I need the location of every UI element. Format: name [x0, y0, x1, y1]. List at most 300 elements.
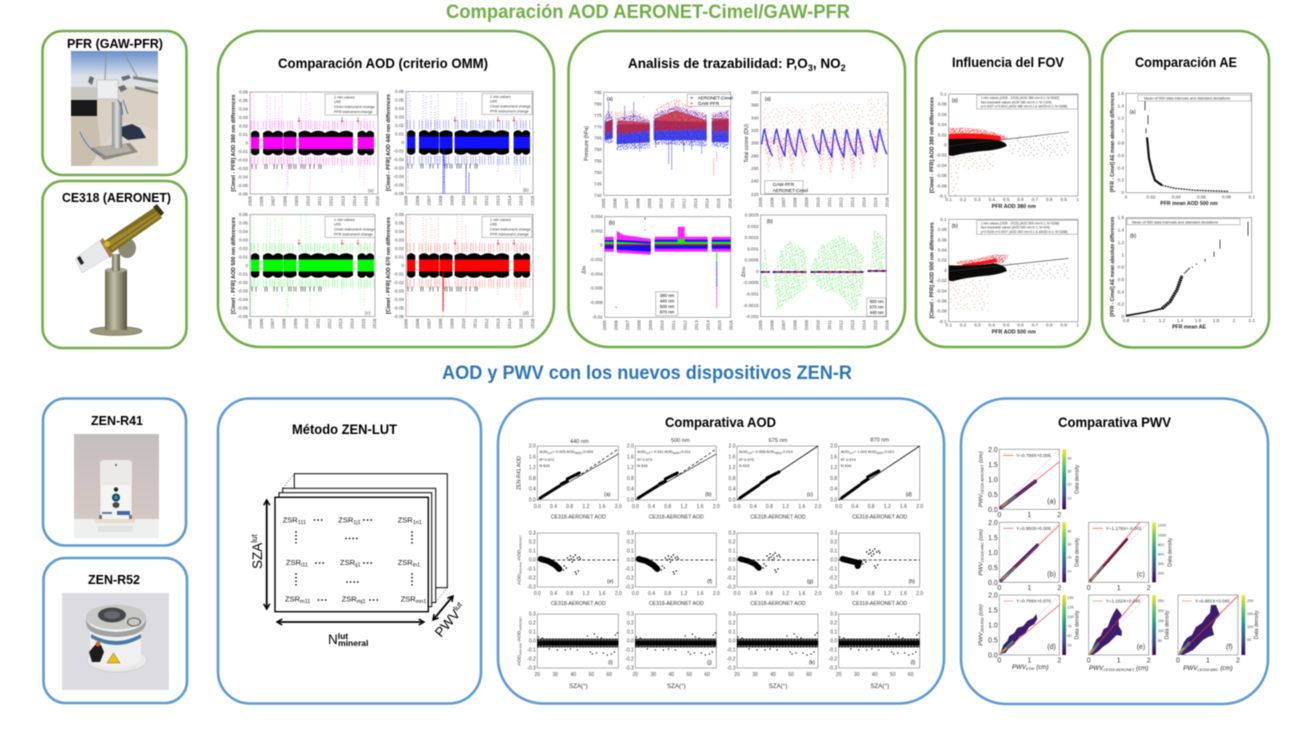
- chart: AOD 670 nm differences: [386, 212, 535, 329]
- chart: AE vs AOD: 0: [1125, 194, 1128, 199]
- chart: PWV (b): PWV: [978, 562, 984, 576]
- chart: PWV (b): 2: [1057, 585, 1061, 592]
- chart: pressure: 760: [594, 147, 602, 152]
- chart: PWV (a): 0.0: [988, 507, 998, 514]
- chart: FOV 500 nm: [930, 217, 1079, 335]
- chart: PWV (d): Data density: [1074, 610, 1080, 639]
- chart: AOD 670 nm differences: 0.02: [395, 246, 404, 251]
- chart group: AOD 870 nm column: -0.021: [883, 449, 894, 454]
- chart group: AOD 500 nm column: 1.6: [627, 454, 634, 460]
- chart group: AOD 500 nm column: 2.0: [713, 504, 720, 510]
- chart group: AOD 675 nm column: -0.014: [782, 449, 794, 454]
- panel: ZEN-R52: [44, 558, 187, 703]
- chart: AOD 500 nm differences: 2005: [248, 318, 252, 329]
- chart group: AOD 870 nm column: 2.0: [916, 504, 923, 510]
- chart group: AOD 870 nm column: 60: [908, 672, 914, 678]
- chart: PWV (d): PWV: [978, 632, 984, 646]
- chart: AE vs AE: 0.8: [1118, 265, 1124, 270]
- panel: ZEN-R41: [43, 398, 186, 546]
- chart: delta tau O3: 2013: [850, 320, 855, 330]
- chart group: AOD 440 nm column: 0.8: [566, 504, 573, 510]
- chart: AOD 670 nm differences: -0.03: [394, 288, 404, 294]
- chart: PWV (e): CE318-AERONET: [1103, 668, 1135, 672]
- panel: Método ZEN-LUT: [218, 398, 481, 704]
- chart: FOV 500 nm: 0.4: [989, 322, 995, 327]
- chart: AOD 500 nm differences: 2011: [316, 318, 320, 328]
- chart: AOD 500 nm differences: 2016: [372, 318, 377, 329]
- chart: PWV (c): 400: [1158, 562, 1164, 566]
- chart: AE vs AE: [1110, 215, 1255, 331]
- chart: FOV 500 nm: 0.02: [938, 258, 947, 263]
- heading: ZEN-R41: ZEN-R41: [91, 414, 143, 428]
- chart group: AOD 440 nm column: 0.0: [534, 504, 541, 510]
- heading: Comparación AOD (criterio OMM): Comparación AOD (criterio OMM): [278, 56, 488, 71]
- chart: total ozone: 360: [751, 102, 759, 107]
- chart: PWV (a): 2.0: [988, 447, 998, 454]
- chart: PWV (b): [978, 520, 1080, 592]
- panel: Comparación AE: [1102, 31, 1269, 348]
- chart: delta tau O3: 500 nm: [870, 299, 884, 304]
- chart group: AOD 870 nm column: 0.0: [835, 591, 842, 597]
- label: PWV lut: PWV: [432, 607, 463, 640]
- chart group: AOD 675 nm column: 2.0: [815, 504, 822, 510]
- chart: AOD 670 nm differences: 2005: [404, 318, 408, 329]
- matrix labels: ZSR cells: in1: [413, 562, 420, 568]
- chart: PWV (c): 0: [1087, 585, 1091, 592]
- chart: pressure: 745: [594, 181, 602, 186]
- chart group: AOD 440 nm column: AOD: [517, 574, 522, 585]
- chart: PWV (b): 2.0: [988, 520, 998, 527]
- chart group: AOD 500 nm column: 30: [651, 672, 656, 678]
- chart group: AOD 675 nm column: 0.4: [729, 487, 736, 493]
- chart: FOV 500 nm: 0.2: [960, 322, 967, 327]
- chart: AE vs AOD: Mean of 500 data intervals and standard deviations: [1144, 97, 1230, 101]
- chart: pressure: 2013: [693, 198, 698, 209]
- chart: AOD 380 nm differences: 2016: [375, 196, 380, 206]
- chart: PWV (f): Data density: [1254, 610, 1260, 639]
- chart group: AOD 440 nm column: 0.8: [529, 476, 536, 482]
- chart: AOD 380 nm differences: -0.02: [238, 158, 248, 162]
- matrix labels: ZSR cells: mn1: [416, 599, 426, 605]
- chart: AE vs AOD: PFR mean AOD 500 nm: [1160, 201, 1218, 207]
- chart: AOD 670 nm differences: 2008: [438, 318, 443, 329]
- chart: PWV (c): 1: [1117, 585, 1121, 592]
- chart group: AOD 500 nm column: 2.0: [627, 444, 634, 450]
- chart group: AOD 870 nm column: 870 nm: [870, 438, 889, 444]
- chart: FOV 380 nm: 0.7: [1032, 197, 1039, 202]
- chart: PWV (c): Y=1.178X+-0.001: [1106, 526, 1142, 531]
- chart group: AOD 440 nm column: 20: [535, 672, 540, 678]
- chart group: AOD 675 nm column: R² 0.975: [739, 457, 754, 462]
- chart group: AOD 440 nm column: -0.3: [527, 584, 536, 590]
- chart: delta tau O3: 2006: [770, 320, 775, 330]
- chart: PWV (d): Y=0.799X+0.070: [1016, 598, 1051, 604]
- chart: total ozone: 2011: [827, 197, 832, 207]
- chart group: AOD 500 nm column: SZA(°): [667, 683, 686, 690]
- chart: PWV (d): 1: [1027, 658, 1031, 664]
- chart: PWV (d): (d): [1047, 644, 1056, 651]
- chart: AOD 500 nm differences: 2013: [338, 318, 343, 329]
- chart group: AOD 440 nm column: CE318-AERONET AOD: [551, 601, 606, 607]
- chart: AOD 380 nm differences: 0.06: [239, 90, 248, 94]
- matrix labels: ZSR cells: 1n1: [413, 520, 422, 526]
- chart: FOV 380 nm: 0.04: [938, 122, 947, 127]
- chart: PWV (a): 1: [1027, 512, 1031, 519]
- chart: delta tau R: 0.002: [591, 228, 603, 233]
- chart group: AOD 870 nm column: 0.3: [830, 612, 837, 618]
- chart: AOD 440 nm differences: -0.05: [394, 182, 404, 188]
- chart group: AOD 675 nm column: (k): [809, 660, 815, 666]
- chart: total ozone: 260: [751, 166, 759, 171]
- chart: PWV (a): (a): [1047, 498, 1056, 505]
- chart group: AOD 675 nm column: 0.4: [750, 504, 757, 510]
- chart group: AOD 440 nm column: 0.0: [529, 498, 536, 504]
- chart: PWV (e): 150: [1158, 619, 1164, 623]
- chart group: AOD 675 nm column: (g): [807, 579, 813, 585]
- chart: pressure: 2005: [601, 198, 606, 209]
- chart: PWV (b): (cm): [978, 529, 984, 542]
- chart: pressure: 740: [594, 193, 602, 198]
- chart: FOV 500 nm: 0.1: [940, 217, 947, 222]
- chart: AOD 500 nm differences: PFR instrument change: [334, 232, 373, 236]
- chart: AOD 500 nm differences: 2014: [350, 318, 354, 329]
- chart: PWV (f): 50: [1247, 638, 1251, 642]
- chart: AOD 380 nm differences: Cimel instrument change: [334, 105, 375, 109]
- chart: AOD 380 nm differences: -0.05: [238, 183, 248, 188]
- chart: AOD 380 nm differences: 0.04: [239, 106, 248, 112]
- chart: AOD 380 nm differences: U95: [334, 100, 341, 104]
- matrix labels: ZSR cells: ZSR: [285, 594, 300, 604]
- chart: FOV 380 nm: [Cimel - PFR] AOD 380 nm differences: [930, 97, 936, 193]
- heading: CE318 (AERONET): CE318 (AERONET): [62, 191, 171, 205]
- chart: AE vs AE: 0.8: [1123, 318, 1130, 323]
- chart: PWV (e): (e): [1137, 644, 1145, 651]
- chart: total ozone: [744, 90, 890, 208]
- chart: FOV 500 nm: 0: [944, 268, 947, 273]
- chart group: AOD 675 nm column: 0.2: [729, 620, 736, 626]
- chart: AE vs AOD: [1110, 91, 1255, 207]
- chart: PWV (d): 1.0: [988, 622, 998, 630]
- chart: FOV 500 nm: 1 min values (2005 - 2015) (AOD 500 nm<0.1; N=5268): [981, 221, 1059, 225]
- chart group: AOD 870 nm column: LUT: [849, 452, 854, 455]
- chart group: AOD 440 nm column: CE318-AERONET AOD: [551, 514, 606, 520]
- chart: PWV (d): 0: [997, 658, 1001, 664]
- chart: AOD 670 nm differences: -0.06: [394, 314, 404, 319]
- chart: total ozone: 2006: [770, 197, 775, 208]
- chart: AOD 670 nm differences: 2011: [472, 318, 478, 328]
- chart: AOD 440 nm differences: 2013: [496, 195, 500, 206]
- arrow: SZA axis: [266, 500, 268, 609]
- chart group: AOD 870 nm column: 2.0: [830, 444, 837, 450]
- chart group: AOD 500 nm column: -0.2: [625, 656, 634, 662]
- chart: AOD 670 nm differences: 2010: [461, 318, 466, 329]
- heading: ZEN-R52: ZEN-R52: [88, 573, 140, 587]
- chart: PWV (d): 1.5: [988, 608, 998, 614]
- chart group: AOD 675 nm column: SZA(°): [769, 683, 787, 690]
- chart group: AOD 500 nm column: 0.8: [664, 591, 671, 597]
- matrix labels: ZSR cells: ZSR: [340, 558, 355, 567]
- chart: AOD 440 nm differences: (b): [523, 188, 529, 192]
- chart: AOD 670 nm differences: PFR instrument change: [490, 232, 529, 236]
- chart: AE vs AE: 1.4: [1118, 227, 1124, 232]
- chart: delta tau R: 2012: [683, 320, 688, 330]
- chart: total ozone: GAW-PFR: [773, 182, 795, 187]
- chart: pressure: 2006: [613, 198, 618, 209]
- chart: delta tau R: (b): [609, 221, 615, 227]
- chart: AE vs AE: [PFR - Cimel] AE mean absolute differences: [1110, 217, 1116, 317]
- chart group: AOD 440 nm column: -0.2: [527, 656, 536, 662]
- chart group: AOD 870 nm column: 0.2: [830, 620, 837, 626]
- chart: delta tau R: -0.008: [590, 300, 603, 305]
- chart: AE vs AE: 1.4: [1177, 318, 1184, 323]
- chart: AOD 670 nm differences: 1 min values: [490, 218, 511, 222]
- chart: PWV (e): PWV: [1089, 665, 1103, 672]
- chart group: AOD 500 nm column: -0.3: [625, 584, 634, 590]
- chart: AOD 670 nm differences: 0.06: [395, 212, 404, 217]
- chart: PWV (e): 250: [1158, 599, 1164, 603]
- chart: delta tau O3: 2015: [873, 320, 878, 330]
- chart: FOV 380 nm: PFR AOD 380 nm: [992, 204, 1036, 210]
- chart group: AOD 440 nm column: AERONET: [518, 616, 522, 631]
- chart: PWV (a): 10: [1067, 496, 1072, 500]
- chart group: AOD 675 nm column: -0.2: [727, 576, 736, 582]
- chart group: AOD 500 nm column: R² 0.973: [637, 457, 652, 462]
- chart: delta tau R: 0.004: [591, 214, 603, 219]
- chart group: AOD 500 nm column: 50: [687, 672, 692, 678]
- chart group: AOD 870 nm column: 20: [836, 672, 842, 678]
- chart: AOD 440 nm differences: 2008: [438, 195, 443, 206]
- chart: FOV 500 nm: 0.06: [938, 237, 947, 242]
- chart group: AOD 440 nm column: 2.0: [529, 444, 536, 450]
- chart: PWV (e): Y=1.162X+0.040: [1106, 598, 1141, 604]
- chart: PWV (a): 30: [1067, 469, 1072, 473]
- chart: delta tau O3: -0.0015: [743, 303, 759, 308]
- chart group: AOD 870 nm column: 0.0: [835, 504, 842, 510]
- chart: AE vs AE: Mean of 500 data intervals and standard deviations: [1132, 220, 1218, 224]
- chart: PWV (e): 100: [1158, 629, 1164, 633]
- chart: PWV (b): Data density: [1074, 537, 1080, 567]
- chart: FOV 500 nm: Non-traceable values (AOD 500 nm<0.1; N=424): [981, 226, 1050, 230]
- matrix labels: ZSR cells: i11: [301, 562, 308, 568]
- chart group: AOD 500 nm column: -0.011: [680, 449, 691, 454]
- chart group: AOD 870 nm column: 0.4: [830, 487, 837, 493]
- chart group: AOD 440 nm column: ZEN-R41: [518, 642, 522, 655]
- chart group: AOD 675 nm column: -0.3: [727, 584, 736, 590]
- chart group: AOD 675 nm column: 0.0: [734, 591, 741, 597]
- chart group: AOD 440 nm column: 30: [553, 672, 558, 678]
- chart: PWV (c): [1087, 522, 1174, 592]
- chart group: AOD 440 nm column: 2.0: [615, 591, 622, 597]
- chart: PWV (c): (c): [1137, 571, 1145, 578]
- chart: AOD 440 nm differences: Cimel instrument change: [490, 104, 531, 108]
- chart group: AOD 440 nm column: ZEN-R41 AOD: [516, 456, 522, 490]
- chart: AE vs AE: 0.6: [1118, 277, 1124, 282]
- chart: AOD 670 nm differences: 0.03: [395, 238, 404, 242]
- label: SZA lut: lut: [250, 534, 259, 543]
- chart: delta tau O3: -0.001: [746, 292, 759, 296]
- chart: AOD 440 nm differences: 2005: [404, 195, 408, 206]
- chart group: AOD 870 nm column: SZA(°): [870, 683, 889, 690]
- chart: FOV 380 nm: 0.02: [938, 132, 947, 137]
- chart: AE vs AOD: 0.4: [1118, 165, 1124, 170]
- chart: AOD 500 nm differences: -0.03: [238, 288, 248, 294]
- chart: AOD 380 nm differences: -0.06: [238, 192, 248, 196]
- chart group: AOD 440 nm column: AERO: [575, 452, 582, 455]
- chart: total ozone: 2009: [804, 197, 809, 208]
- chart group: AOD 440 nm column: ZEN-R41: [518, 561, 522, 574]
- arrow: N mineral axis: [277, 621, 424, 623]
- chart: AOD 440 nm differences: 2015: [518, 195, 524, 206]
- chart group: AOD 440 nm column: AOD: [539, 449, 593, 455]
- chart: delta tau O3: 2008: [793, 320, 798, 330]
- chart: AOD 380 nm differences: 0: [245, 140, 248, 146]
- chart: AE vs AOD: (a): [1130, 109, 1136, 115]
- chart: pressure: 2010: [659, 198, 664, 209]
- chart: AOD 670 nm differences: 0: [401, 263, 404, 268]
- chart: AOD 440 nm differences: 2014: [507, 195, 512, 206]
- chart: AE vs AOD: 0.08: [1222, 194, 1231, 199]
- chart: PWV (b): CE318-MAC: [980, 542, 984, 562]
- chart group: AOD 440 nm column: 0.1: [529, 630, 536, 636]
- chart: PWV (b): 1.5: [988, 535, 998, 542]
- chart: AOD 440 nm differences: PFR instrument change: [490, 109, 529, 113]
- chart group: AOD 440 nm column: = 0.925 AOD: [552, 449, 575, 454]
- chart group: AOD 500 nm column: 0.8: [627, 476, 634, 482]
- chart: delta tau O3: 2005: [758, 320, 763, 330]
- chart: FOV 380 nm: -0.08: [936, 183, 947, 188]
- chart group: AOD 870 nm column: 1.6: [900, 591, 907, 597]
- chart group: AOD 675 nm column: -0.3: [727, 666, 736, 672]
- chart group: AOD 440 nm column: -0.009: [582, 449, 593, 454]
- chart: FOV 500 nm: 1: [1076, 322, 1079, 327]
- chart group: AOD 870 nm column: (d): [906, 492, 912, 498]
- matrix labels: ZSR cells: ZSR: [398, 516, 413, 524]
- chart: delta tau R: 2016: [729, 320, 734, 330]
- chart group: AOD 440 nm column: 1.2: [582, 591, 590, 597]
- chart group: AOD 675 nm column: 0.0: [729, 558, 736, 564]
- chart group: AOD 500 nm column: 40: [669, 672, 674, 678]
- chart: PWV (f): 1: [1206, 658, 1210, 664]
- chart: delta tau O3: 2007: [781, 320, 786, 330]
- chart: total ozone: AERONET-Cimel: [773, 188, 808, 193]
- chart group: AOD 675 nm column: 0.1: [729, 548, 736, 554]
- chart: AOD 380 nm differences: -0.04: [238, 174, 248, 180]
- chart group: AOD 675 nm column: N 616: [739, 463, 749, 468]
- chart: AOD 380 nm differences: 2005: [248, 196, 252, 206]
- chart group: AOD 440 nm column: 0.3: [529, 530, 536, 536]
- chart: delta tau O3: (b): [767, 219, 773, 225]
- chart: FOV 380 nm: [930, 92, 1079, 210]
- chart: AOD 670 nm differences: 2016: [530, 318, 535, 329]
- chart: delta tau R: -0.004: [590, 271, 603, 276]
- chart: AOD 670 nm differences: 2013: [496, 318, 500, 329]
- diagram: ZEN-LUT data cube: [275, 474, 447, 612]
- chart group: AOD 440 nm column: (i): [608, 660, 613, 666]
- chart group: AOD 440 nm column: 1.6: [599, 591, 606, 597]
- chart: AOD 500 nm differences: -0.02: [238, 280, 248, 285]
- chart group: AOD 440 nm column: (e): [607, 579, 614, 585]
- chart group: AOD 870 nm column: 0.0: [830, 558, 837, 564]
- chart: delta tau R: 500 nm: [660, 304, 675, 309]
- chart group: AOD 870 nm column: 2.0: [916, 591, 923, 597]
- chart: PWV (f): 200: [1247, 599, 1253, 603]
- chart: FOV 500 nm: 0.5: [1003, 322, 1010, 327]
- chart: delta tau O3: 2011: [827, 320, 832, 330]
- matrix labels: ZSR cells: ZSR: [283, 516, 298, 524]
- chart group: AOD 675 nm column: 0.0: [734, 504, 741, 510]
- chart group: AOD 870 nm column: (l): [911, 660, 915, 666]
- chart: total ozone: 2008: [793, 197, 798, 208]
- chart: total ozone: (a): [765, 96, 771, 102]
- chart group: AOD 440 nm column: 0.0: [534, 591, 541, 597]
- chart: AOD 440 nm differences: -0.04: [394, 174, 404, 179]
- chart group: AOD 440 nm column: -AOD: [516, 630, 522, 643]
- chart group: AOD 500 nm column: 0.2: [627, 540, 634, 546]
- chart: AOD 380 nm differences: -0.01: [238, 149, 248, 154]
- chart: AOD 440 nm differences: U95: [490, 100, 497, 104]
- chart group: AOD 675 nm column: CE318-AERONET AOD: [751, 514, 806, 520]
- chart: total ozone: 340: [751, 115, 759, 120]
- chart: delta tau R: 440 nm: [660, 299, 675, 304]
- chart group: AOD 500 nm column: 60: [705, 672, 710, 678]
- chart group: AOD 440 nm column: 60: [607, 672, 612, 678]
- chart: PWV (a): Data density: [1074, 464, 1080, 494]
- chart group: AOD 500 nm column: 1.2: [680, 591, 688, 597]
- chart: FOV 500 nm: PFR AOD 500 nm: [992, 329, 1036, 335]
- chart: AOD 440 nm differences: 2007: [426, 195, 432, 206]
- chart group: AOD 675 nm column: AOD: [739, 449, 794, 455]
- matrix labels: ZSR cells: ZSR: [338, 516, 353, 524]
- matrix labels: ZSR cells: m11: [300, 599, 310, 605]
- chart: AOD 440 nm differences: 2016: [530, 195, 535, 206]
- chart group: AOD 500 nm column: 0.4: [648, 504, 655, 510]
- chart group: AOD 870 nm column: 0.4: [851, 591, 859, 597]
- title: Comparación AOD AERONET-Cimel/GAW-PFR: Comparación AOD AERONET-Cimel/GAW-PFR: [446, 2, 850, 23]
- chart: AOD 440 nm differences: 1 min values: [490, 95, 511, 99]
- chart: total ozone: Total ozone (DU): [744, 124, 750, 163]
- matrix labels: ZSR cells: [283, 516, 426, 605]
- chart: FOV 380 nm: (a): [952, 98, 958, 104]
- chart: FOV 500 nm: 0.08: [938, 227, 947, 232]
- chart group: AOD 870 nm column: = 1.003 AOD: [854, 449, 876, 454]
- panel: Influencia del FOV: [916, 31, 1090, 347]
- chart group: AOD 500 nm column: AOD: [637, 449, 691, 455]
- chart: PWV (f): Y=0.981X+0.040: [1195, 598, 1230, 604]
- chart: AOD 670 nm differences: Cimel instrument change: [490, 228, 531, 232]
- chart: FOV 380 nm: 0.6: [1017, 197, 1024, 202]
- chart: delta tau O3: 0.0025: [745, 212, 759, 218]
- chart: AOD 440 nm differences: -0.03: [394, 166, 404, 170]
- chart group: AOD 675 nm column: -0.2: [727, 656, 736, 662]
- chart: total ozone: 240: [751, 178, 759, 183]
- chart: AOD 500 nm differences: -0.04: [238, 297, 248, 302]
- chart: FOV 500 nm: 0.6: [1017, 322, 1024, 327]
- chart: delta tau R: -0.01: [592, 315, 603, 320]
- chart group: AOD 440 nm column: 1.6: [599, 504, 606, 510]
- chart: AOD 500 nm differences: -0.01: [238, 272, 248, 276]
- chart: AOD 670 nm differences: 0.05: [395, 220, 404, 226]
- chart: FOV 380 nm: 0.1: [940, 92, 947, 96]
- chart: PWV (e): 0: [1087, 658, 1091, 664]
- label: N lut mineral: mineral: [338, 638, 368, 648]
- chart group: AOD 500 nm column: 0.3: [627, 530, 634, 536]
- chart: PWV (a): 0.5: [988, 492, 998, 499]
- chart group: AOD 870 nm column: -0.2: [829, 656, 837, 662]
- chart: AOD 500 nm differences: 0.05: [239, 220, 248, 226]
- chart: AOD 670 nm differences: 2015: [518, 318, 524, 329]
- chart group: AOD 500 nm column: [625, 438, 720, 690]
- chart: AOD 500 nm differences: 0.03: [239, 238, 248, 242]
